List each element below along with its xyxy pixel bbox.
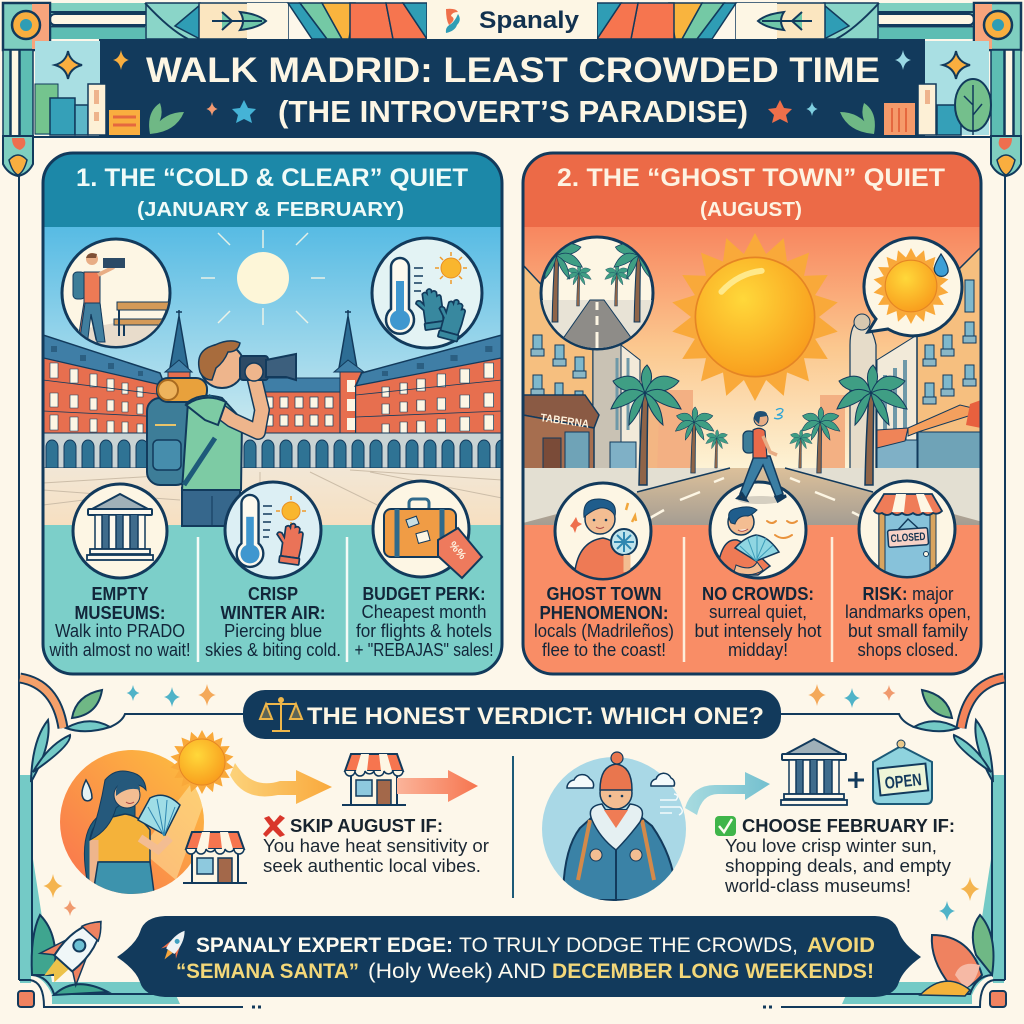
teal lower panel [44,525,500,526]
callout line 2: (Holy Week) AND [368,960,546,983]
street scene [524,248,980,525]
dividers [684,537,832,662]
icon: closed shop: CLOSED [890,531,926,545]
text: choose February: CHOOSE FEBRUARY IF: [742,815,955,836]
text: risk [845,584,971,660]
callout line 2: “SEMANA SANTA” [176,960,359,983]
plus sign [848,772,864,788]
icon: local with hand fan [555,483,651,585]
icon: scales [260,698,302,731]
text: empty museums: MUSEUMS: [74,603,166,623]
icon: red cross [263,815,285,837]
text: ghost town phenomenon: PHENOMENON: [540,603,668,623]
text: skip August [263,815,489,876]
text: skip August: You have heat sensitivity or [263,836,489,856]
skyline decoration, left [35,41,184,135]
icon: rocket [31,906,119,996]
text: empty museums [49,584,191,660]
callout line 1: AVOID [807,934,875,957]
icon: museum [781,739,847,805]
text: risk: RISK: major [862,584,954,604]
icon: sun speech bubble [864,238,962,336]
corner leaves, right [920,915,994,996]
text: choose February: You love crisp winter sun, [725,836,937,856]
walking person [738,408,786,504]
plaza scene [43,227,502,526]
text: crisp winter air: skies & biting cold. [205,640,341,660]
text: budget perk: BUDGET PERK: [362,584,486,604]
verdict frame ornament, right [781,678,1004,782]
dividers [198,537,347,662]
arrow: teal [685,772,770,815]
text: budget perk: for flights & hotels [356,621,492,641]
callout line 1: SPANALY EXPERT EDGE: [196,934,453,957]
text: ghost town phenomenon: locals (Madrileños) [534,621,674,641]
icon: thermometer and gloves [372,238,482,348]
text: crisp winter air: WINTER AIR: [220,603,326,623]
top decorative strip, left [3,3,427,176]
icon: small shop [183,832,247,883]
panel heading band [523,153,981,227]
top decorative strip, right [597,3,1021,176]
sparkles [43,684,980,921]
text: no crowds: midday! [728,640,788,660]
expert edge callout [117,916,921,997]
title banner [33,39,991,138]
outer frame [19,176,1005,1007]
icon: closed shop [859,481,955,585]
logo: Spanaly: Spanaly [479,7,580,34]
icon: small rocket [157,926,192,965]
text: empty museums: EMPTY [92,584,148,604]
title line 2: (THE INTROVERT’S PARADISE) [278,94,748,129]
heading line 2: (JANUARY & FEBRUARY) [137,199,404,221]
text: no crowds [694,584,822,660]
text: empty museums: Walk into PRADO [55,621,185,641]
text: risk: but small family [848,621,968,641]
callout line 1: TO TRULY DODGE THE CROWDS, [459,934,798,957]
callout line 2: DECEMBER LONG WEEKENDS! [552,960,874,983]
text: budget perk: Cheapest month [362,602,486,622]
text: ghost town phenomenon: GHOST TOWN [546,584,662,604]
callout line 2 [176,960,874,983]
traveller with camera [147,341,296,526]
icon: suitcase with sale tag: %% [446,539,468,562]
text: budget perk: + "REBAJAS" sales! [354,640,494,660]
corner leaves, left [32,915,108,995]
text: crisp winter air: Piercing blue [224,621,322,641]
text: skip August: SKIP AUGUST IF: [290,815,443,836]
text: budget perk [354,584,494,660]
arrow: yellow [230,763,332,804]
icon: shop [342,754,406,805]
text: ghost town phenomenon: flee to the coast! [542,640,666,660]
text: risk: shops closed. [858,640,958,660]
icon: empty palm road [540,236,654,350]
text: skip August: seek authentic local vibes. [263,856,481,876]
heading line 1: 2. THE “GHOST TOWN” QUIET [557,164,945,192]
text: no crowds: surreal quiet, [709,602,807,622]
panel: August [508,153,1001,675]
verdict frame ornament, left [20,678,243,782]
panel: January and February [43,153,502,675]
title line 1: WALK MADRID: LEAST CROWDED TIME [146,51,880,90]
icon: photographer on bench [62,239,172,350]
text: choose February: shopping deals, and empty [725,856,951,876]
shop sign: TABERNA [540,412,590,431]
text: crisp winter air [205,584,341,660]
logo: Spanaly [427,0,597,39]
verdict heading text: THE HONEST VERDICT: WHICH ONE? [307,703,764,730]
text: ghost town phenomenon [534,584,674,660]
icon: big sun [670,233,840,401]
icon: person fanning [710,482,806,578]
icon: open sign [873,740,932,804]
icon: museum [73,484,167,578]
divider [512,756,514,898]
verdict heading pill [243,690,781,739]
heading line 2: (AUGUST) [700,199,802,221]
text: no crowds: but intensely hot [694,621,822,641]
callout line 1 [196,934,875,957]
icon: verdict sun [169,730,235,794]
icon: cold weather [225,482,321,578]
text: choose February [724,815,955,896]
heading line 1: 1. THE “COLD & CLEAR” QUIET [76,164,468,192]
text: empty museums: with almost no wait! [49,640,191,660]
text: crisp winter air: CRISP [248,584,298,604]
icon: open sign: OPEN [884,770,923,793]
small corner squares and dots [18,991,1006,1007]
icon: suitcase with sale tag [373,481,482,578]
text: choose February: world-class museums! [724,876,911,896]
icon: green check [715,816,736,836]
coral lower panel [524,525,980,528]
panel heading band [43,153,502,227]
text: risk: landmarks open, [845,602,971,622]
left verdict illustration: woman in heat [60,750,205,900]
skyline decoration, right [840,41,991,135]
arrow: coral [397,770,478,802]
right verdict illustration: man in winter coat [542,752,686,902]
text: no crowds: NO CROWDS: [702,584,814,604]
